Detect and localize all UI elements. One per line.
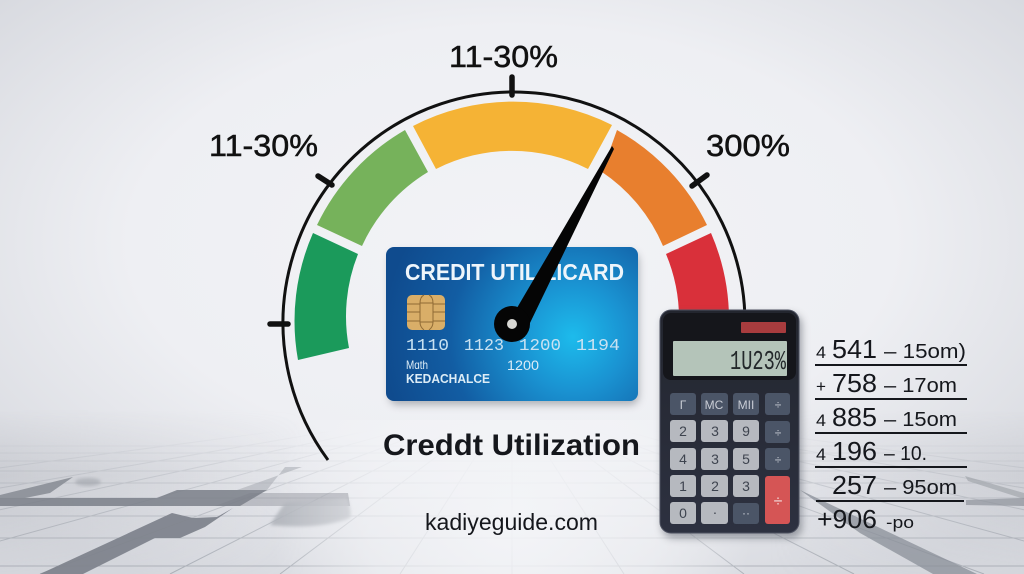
card details: Mɑth	[406, 358, 428, 372]
row 6	[817, 504, 914, 534]
calculator keys: Γ	[680, 398, 687, 412]
calculator keys: ÷	[775, 398, 782, 412]
row 3: – 15om	[884, 409, 957, 431]
floor shadows left	[0, 467, 351, 574]
row 1: 4	[816, 343, 826, 362]
row 4: 196	[832, 436, 877, 466]
row 3: 4	[816, 411, 826, 430]
calculator	[660, 310, 802, 538]
calculator keys: ÷	[775, 426, 782, 440]
calculator keys: 3	[742, 478, 750, 494]
card details	[406, 357, 539, 386]
row 2: +	[816, 377, 826, 396]
website: kadiyeguide.com	[425, 509, 598, 535]
row 4: – 10.	[884, 443, 927, 465]
calculator keys: ·	[713, 504, 717, 520]
calculator keys: 0	[679, 505, 687, 521]
card title: CREDIT UTIL LICARD	[405, 259, 624, 285]
calculator keys	[670, 393, 790, 524]
card number	[406, 337, 620, 356]
gauge segment: light green	[317, 130, 428, 246]
row 6: -po	[886, 513, 914, 532]
row 1: 541	[832, 334, 877, 364]
row 4	[815, 436, 967, 468]
label: right: 300%	[706, 129, 790, 163]
calculator keys: ÷	[775, 453, 782, 467]
row 6: +906	[817, 504, 877, 534]
gauge outer arc	[283, 92, 745, 460]
calculator red indicator	[741, 322, 786, 333]
calculator keys: MC	[705, 398, 724, 412]
card number: 1194	[576, 337, 620, 356]
calculator keys: 9	[742, 423, 750, 439]
heading: credit utilization: Creddt Utilization	[383, 429, 640, 462]
perspective floor grid	[0, 438, 1024, 574]
calculator keys: 3	[711, 451, 719, 467]
row 3	[815, 402, 967, 434]
gauge segment: yellow	[413, 102, 612, 169]
calculator keys: 2	[679, 423, 687, 439]
calculator keys: 4	[679, 451, 687, 467]
list of figures	[815, 334, 967, 534]
card number: 1200	[519, 337, 561, 356]
credit card	[386, 247, 639, 405]
calculator display: 1U23%	[730, 348, 787, 378]
card details: 1200	[507, 357, 539, 373]
row 1	[815, 334, 967, 366]
row 5	[816, 470, 964, 502]
gauge segment: red	[666, 233, 729, 322]
floor shadows right	[800, 476, 1024, 574]
calculator keys: 5	[742, 451, 750, 467]
label: left: 11-30%	[209, 129, 318, 163]
label: top: 11-30%	[449, 40, 558, 74]
calculator keys: ··	[742, 506, 750, 520]
calculator keys: ÷	[774, 493, 783, 510]
gauge segment: orange	[602, 130, 707, 246]
row 2: – 17om	[884, 375, 957, 397]
card chip	[407, 295, 445, 330]
card details: KEDACHALCE	[406, 372, 490, 386]
card number: 1110	[406, 337, 449, 356]
calculator keys: 3	[711, 423, 719, 439]
gauge needle	[494, 146, 614, 342]
card number: 1123	[464, 337, 504, 356]
row 5: 257	[832, 470, 877, 500]
calculator keys: 2	[711, 478, 719, 494]
gauge segment: dark green	[295, 233, 358, 360]
gauge ticks	[270, 77, 707, 324]
row 3: 885	[832, 402, 877, 432]
calculator keys: 1	[679, 478, 687, 494]
row 2	[815, 368, 967, 400]
row 5: – 95om	[884, 477, 957, 499]
calculator display	[673, 341, 787, 378]
calculator keys: MII	[738, 398, 754, 412]
row 4: 4	[816, 445, 826, 464]
row 2: 758	[832, 368, 877, 398]
row 1: – 15om)	[884, 341, 966, 363]
